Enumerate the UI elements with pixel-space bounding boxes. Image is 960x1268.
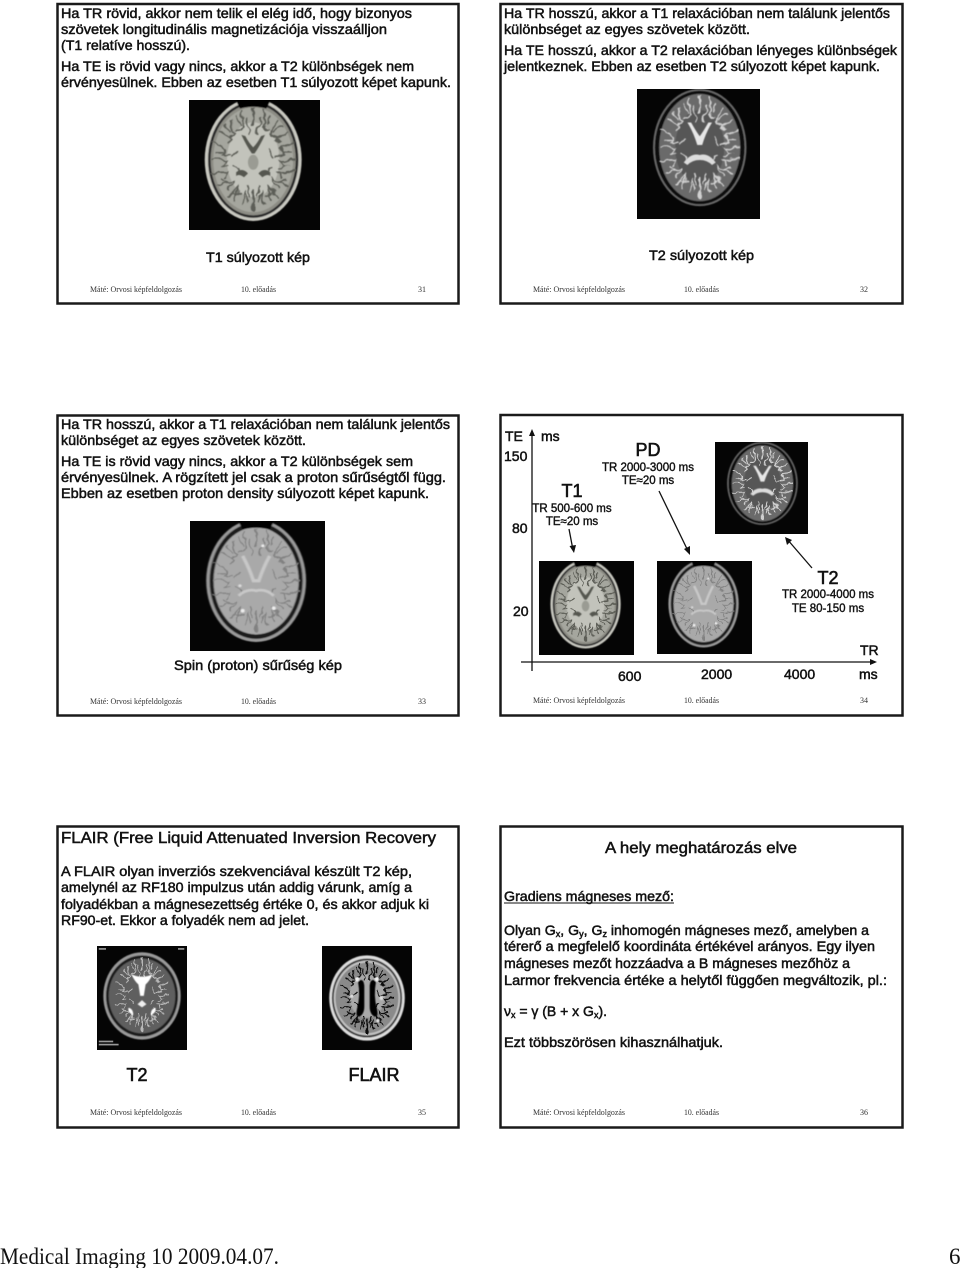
caption: T2: T2 — [126, 1065, 148, 1085]
panel: slide 33 proton density — [58, 416, 458, 716]
slide 31 frame — [58, 4, 458, 304]
panel: slide 36 spatial localisation — [500, 826, 902, 1128]
TE axis labels: ms — [541, 428, 560, 444]
label: T1 parameters: TR 500-600 ms — [532, 503, 612, 515]
slide 31 footer: 10. előadás — [241, 285, 276, 294]
formula: x — [511, 1010, 516, 1020]
slide 36 text block: Larmor frekvencia értéke a helytől függően megváltozik, pl.: — [504, 972, 887, 988]
slide 35 footer — [90, 1108, 426, 1117]
arrow: T1 label to image — [569, 529, 576, 553]
formula: ). — [598, 1003, 607, 1019]
slide 36 text block: Olyan G — [504, 922, 555, 938]
label: T2 parameters: TE 80-150 ms — [792, 603, 864, 615]
slide 35 footer: Máté: Orvosi képfeldolgozás — [90, 1108, 182, 1117]
slide 32 text block — [503, 5, 898, 74]
label: PD parameters: TR 2000-3000 ms — [602, 462, 694, 474]
slide 34 footer: 34 — [860, 696, 868, 705]
slide 36 text block: z — [602, 929, 608, 939]
slide 35 frame — [58, 826, 458, 1128]
slide 32 footer: 10. előadás — [684, 285, 719, 294]
TE axis labels: 80 — [512, 520, 528, 536]
image: FLAIR brain scan — [322, 946, 412, 1050]
slide 35 text block: RF90-et. Ekkor a folyadék nem ad jelet. — [61, 912, 309, 928]
arrow: PD label to image — [659, 491, 690, 555]
slide 36 footer: 36 — [860, 1108, 868, 1117]
vertical TE axis with arrow — [529, 429, 535, 671]
slide 35 footer: 10. előadás — [241, 1108, 276, 1117]
slide 35 text block: amelynél az RF180 impulzus után addig várunk, amíg a — [61, 879, 412, 895]
image: T1 brain scan — [189, 96, 320, 230]
slide 36 text block: , G — [560, 922, 579, 938]
slide 31 text block: szövetek longitudinális magnetizációja visszaálljon — [61, 21, 387, 37]
slide 33 footer: Máté: Orvosi képfeldolgozás — [90, 697, 182, 706]
slide 36 footer: Máté: Orvosi képfeldolgozás — [533, 1108, 625, 1117]
slide 36 footer — [533, 1108, 868, 1117]
slide 36 heading: A hely meghatározás elve — [605, 840, 797, 857]
slide 36 text block: y — [579, 929, 584, 939]
formula: x — [594, 1010, 599, 1020]
slide 32 footer — [533, 285, 868, 294]
slide 33 text block: Ha TR hosszú, akkor a T1 relaxációban nem találunk jelentős — [61, 416, 450, 432]
slide 31 text block: Ha TR rövid, akkor nem telik el elég idő, hogy bizonyos — [61, 5, 412, 21]
label: T2 parameters — [782, 568, 874, 615]
TR axis labels: ms — [859, 666, 878, 682]
slide 32 text block: különbséget az egyes szövetek között. — [504, 21, 750, 37]
slide 31 footer — [90, 285, 426, 294]
slide 36 text block: , G — [584, 922, 602, 938]
image: T2 brain scan small — [715, 442, 808, 534]
slide 33 frame — [58, 416, 458, 716]
closing sentence: Ezt többszörösen kihasználhatjuk. — [504, 1034, 723, 1050]
slide 31 footer: 31 — [418, 285, 426, 294]
TR axis labels: TR — [860, 642, 879, 658]
slide 31 footer: Máté: Orvosi képfeldolgozás — [90, 285, 182, 294]
slide 36 text block — [504, 922, 887, 988]
formula: = γ (B + x G — [515, 1003, 594, 1019]
TR axis labels: 600 — [618, 668, 642, 684]
subheading: gradient magnetic field: Gradiens mágneses mező: — [504, 888, 674, 904]
slide 32 text block: jelentkeznek. Ebben az esetben T2 súlyozott képet kapunk. — [503, 58, 880, 74]
arrow: T2 label to image — [785, 537, 812, 568]
image: T2 brain scan — [97, 946, 187, 1050]
slide 33 footer: 33 — [418, 697, 426, 706]
slide 34 frame — [500, 415, 902, 716]
horizontal TR axis with arrow — [521, 659, 877, 665]
label: T2 parameters: TR 2000-4000 ms — [782, 589, 874, 601]
TR axis labels: 2000 — [701, 666, 732, 682]
caption: T1 weighted image: T1 súlyozott kép — [206, 249, 310, 265]
panel: slide 32 T2 weighted — [500, 4, 902, 304]
caption: T2 weighted image: T2 súlyozott kép — [649, 247, 754, 263]
slide 33 text block: érvényesülnek. A rögzített jel csak a proton sűrűségtől függ. — [61, 469, 446, 485]
image: T1 brain scan small — [539, 558, 634, 655]
slide 33 footer: 10. előadás — [241, 697, 276, 706]
panel: slide 35 FLAIR — [58, 826, 458, 1128]
slide 36 text block: x — [556, 929, 561, 939]
slide 34 footer: 10. előadás — [684, 696, 719, 705]
panel: slide 34 TE/TR diagram — [500, 415, 902, 716]
slide 33 text block: különbséget az egyes szövetek között. — [61, 432, 306, 448]
slide 33 footer — [90, 697, 426, 706]
TE axis labels: 20 — [513, 603, 529, 619]
slide 36 frame — [500, 826, 902, 1128]
TE axis labels: TE — [505, 428, 523, 444]
slide 33 text block: Ha TE is rövid vagy nincs, akkor a T2 különbségek sem — [61, 453, 413, 469]
TE axis labels: 150 — [504, 448, 528, 464]
slide 31 text block: Ha TE is rövid vagy nincs, akkor a T2 különbségek nem — [61, 58, 414, 74]
image: T2 brain scan — [637, 89, 760, 219]
label: T1 parameters: TE≈20 ms — [546, 516, 598, 528]
slide 31 text block: (T1 relatíve hosszú). — [61, 37, 190, 53]
slide 35 text block: A FLAIR olyan inverziós szekvenciával készült T2 kép, — [61, 863, 412, 879]
TE axis labels — [504, 428, 560, 619]
slide 31 text block — [61, 5, 451, 90]
label: T1 parameters: T1 — [561, 481, 583, 501]
slide 34 footer: Máté: Orvosi képfeldolgozás — [533, 696, 625, 705]
slide 36 footer: 10. előadás — [684, 1108, 719, 1117]
TR axis labels: 4000 — [784, 666, 815, 682]
label: PD parameters — [602, 440, 694, 487]
slide 32 footer: 32 — [860, 285, 868, 294]
slide 36 text block: térerő a megfelelő koordináta értékével arányos. Egy ilyen — [504, 938, 875, 954]
slide 36 text block: inhomogén mágneses mező, amelyben a — [607, 922, 869, 938]
image: PD brain scan small — [657, 558, 752, 654]
slide 33 text block — [61, 416, 450, 501]
slide 33 text block: Ebben az esetben proton density súlyozott képet kapunk. — [61, 485, 429, 501]
slide 35 footer: 35 — [418, 1108, 426, 1117]
caption: FLAIR: FLAIR — [348, 1065, 400, 1085]
slide 31 text block: érvényesülnek. Ebben az esetben T1 súlyozott képet kapunk. — [61, 74, 451, 90]
slide 32 footer: Máté: Orvosi képfeldolgozás — [533, 285, 625, 294]
image: proton density brain scan — [190, 517, 325, 651]
slide 32 text block: Ha TE hosszú, akkor a T2 relaxációban lényeges különbségek — [504, 42, 898, 58]
slide 32 frame — [500, 4, 902, 304]
slide 35 heading: FLAIR (Free Liquid Attenuated Inversion Recovery — [61, 830, 436, 847]
slide 35 text block — [61, 863, 429, 928]
label: T1 parameters — [532, 481, 612, 528]
formula: ν — [504, 1003, 511, 1019]
slide 35 text block: folyadékban a mágnesezettség értéke 0, és akkor adjuk ki — [61, 896, 429, 912]
TR axis labels — [618, 642, 879, 684]
label: PD parameters: PD — [635, 440, 661, 460]
slide 32 text block: Ha TR hosszú, akkor a T1 relaxációban nem találunk jelentős — [504, 5, 890, 21]
slide 36 text block: mágneses mezőt hozzáadva a B mágneses mezőhöz a — [504, 955, 850, 971]
slide 34 footer — [533, 696, 868, 705]
label: PD parameters: TE≈20 ms — [622, 475, 674, 487]
label: T2 parameters: T2 — [817, 568, 839, 588]
caption: spin proton density image: Spin (proton) sűrűség kép — [174, 657, 342, 673]
panel: slide 31 T1 weighted — [58, 4, 458, 304]
